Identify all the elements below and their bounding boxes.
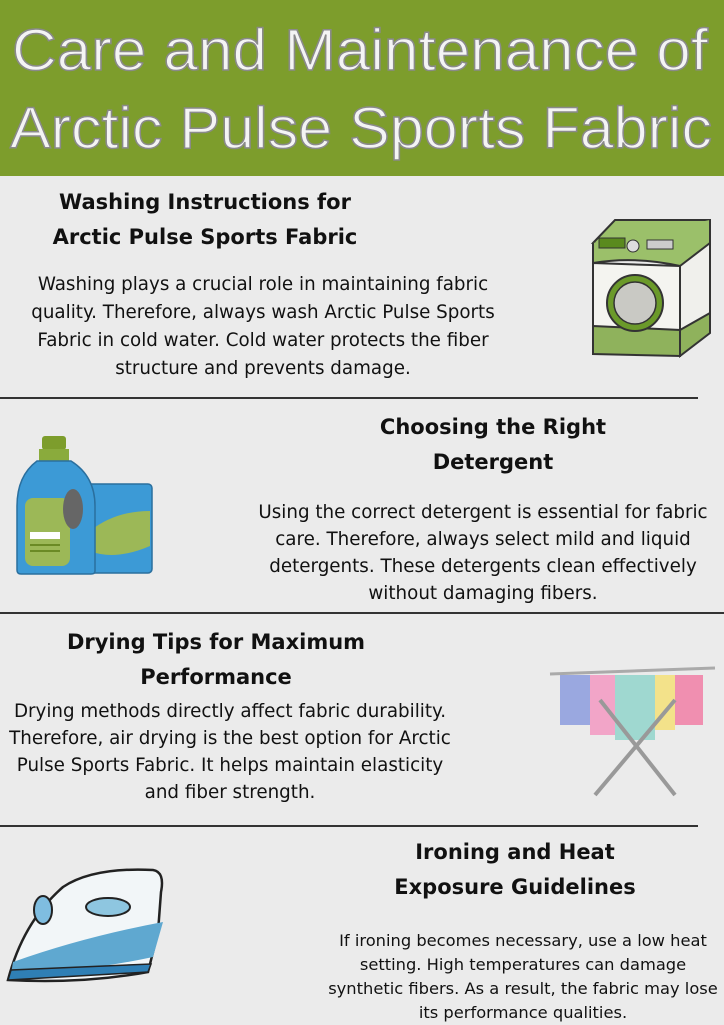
- title banner: [0, 0, 724, 176]
- panel: detergent: [16, 415, 708, 604]
- text: washing: structure and prevents damage.: [115, 358, 411, 379]
- text: ironing: its performance qualities.: [419, 1003, 627, 1022]
- text: drying: [9, 701, 451, 803]
- heading: ironing: Ironing and Heat: [415, 840, 615, 864]
- text: detergent: detergents. These detergents clean effectively: [269, 556, 697, 577]
- heading: washing: Washing Instructions for: [59, 190, 351, 214]
- heading: drying: Performance: [140, 665, 292, 689]
- icon: iron: [6, 868, 164, 982]
- heading: ironing: [394, 840, 636, 899]
- heading: detergent: Detergent: [433, 450, 553, 474]
- text: washing: Washing plays a crucial role in maintaining fabric: [38, 274, 488, 295]
- title text: [10, 18, 712, 161]
- panel: drying: [9, 630, 715, 803]
- heading: detergent: [380, 415, 606, 474]
- heading: washing: Arctic Pulse Sports Fabric: [53, 225, 357, 249]
- text: ironing: [328, 931, 718, 1022]
- text: washing: quality. Therefore, always wash Arctic Pulse Sports: [31, 302, 495, 323]
- heading: drying: Drying Tips for Maximum: [67, 630, 365, 654]
- text: drying: and fiber strength.: [145, 782, 315, 803]
- text: detergent: care. Therefore, always select mild and liquid: [275, 529, 691, 550]
- text: washing: [31, 274, 495, 379]
- icon: washing machine: [591, 219, 711, 358]
- heading: washing: [52, 190, 357, 249]
- icon: drying rack: [550, 666, 715, 796]
- text: detergent: [258, 502, 708, 604]
- text: drying: Drying methods directly affect fabric durability.: [14, 701, 446, 722]
- text: ironing: If ironing becomes necessary, use a low heat: [339, 931, 707, 950]
- panel: ironing: [6, 840, 718, 1022]
- text: detergent: without damaging fibers.: [368, 583, 598, 604]
- title text: Care and Maintenance of: [12, 18, 709, 83]
- heading: ironing: Exposure Guidelines: [394, 875, 636, 899]
- text: ironing: setting. High temperatures can damage: [360, 955, 686, 974]
- text: washing: Fabric in cold water. Cold water protects the fiber: [37, 330, 489, 351]
- text: ironing: synthetic fibers. As a result, the fabric may lose: [328, 979, 718, 998]
- text: detergent: Using the correct detergent is essential for fabric: [258, 502, 708, 523]
- icon: detergent bottle: [16, 436, 153, 575]
- heading: detergent: Choosing the Right: [380, 415, 606, 439]
- panel: washing: [31, 190, 711, 379]
- text: drying: Pulse Sports Fabric. It helps maintain elasticity: [17, 755, 443, 776]
- heading: drying: [67, 630, 365, 689]
- title text: Arctic Pulse Sports Fabric: [10, 96, 712, 161]
- text: drying: Therefore, air drying is the best option for Arctic: [9, 728, 451, 749]
